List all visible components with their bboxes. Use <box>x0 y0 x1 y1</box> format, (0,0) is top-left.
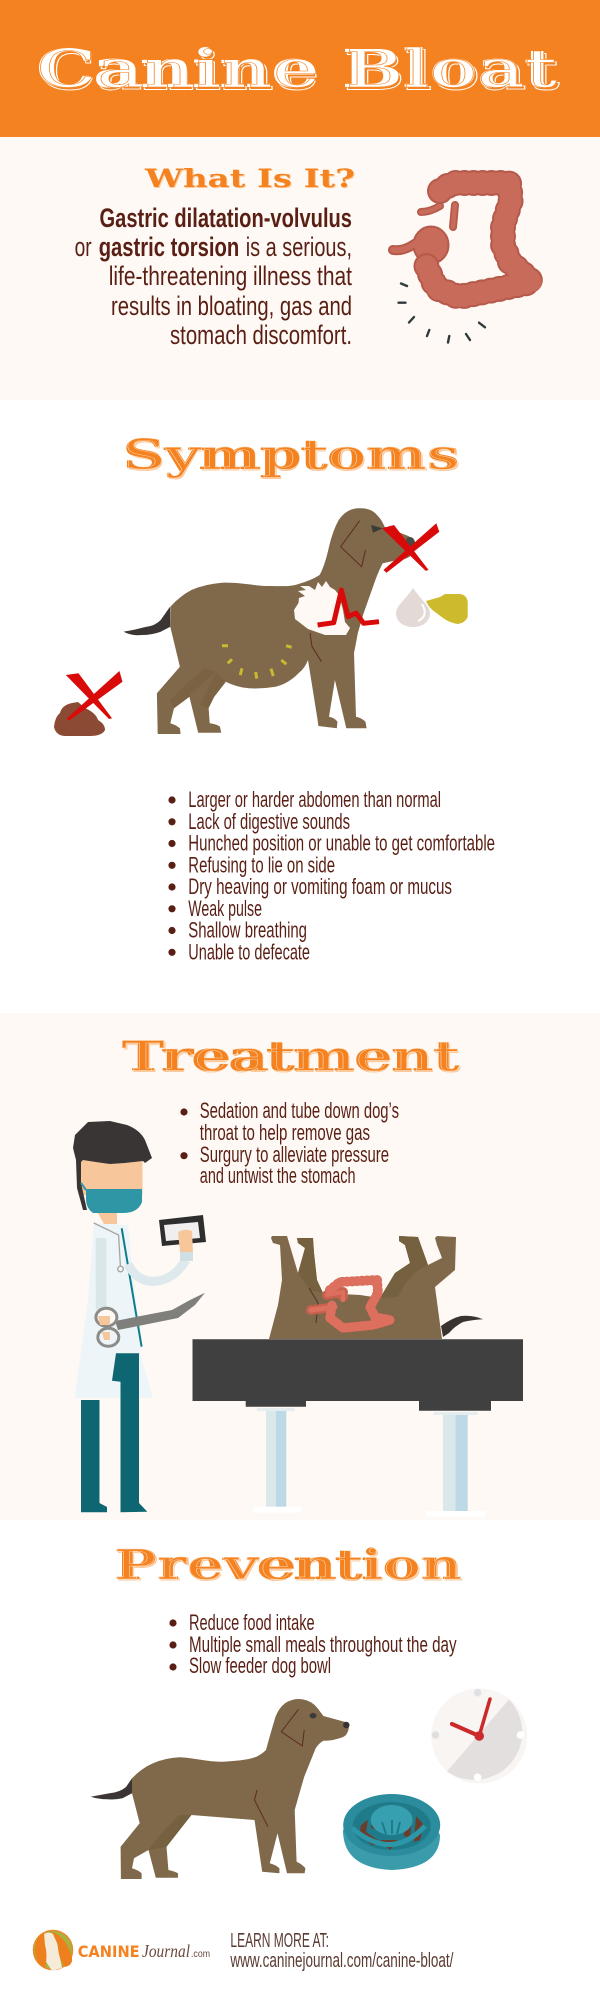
heading: what is it: What Is It? <box>144 164 355 193</box>
dog ear <box>341 521 366 567</box>
title: Canine Bloat <box>38 42 560 102</box>
symptoms bullet list: Lack of digestive sounds <box>188 809 350 834</box>
logo: canine journal <box>34 1930 210 1971</box>
tablet <box>159 1215 206 1246</box>
clock centre <box>474 1731 484 1741</box>
table top <box>192 1339 523 1411</box>
prevention bullet list: Multiple small meals throughout the day <box>189 1632 457 1657</box>
heading: symptoms <box>122 431 461 480</box>
logo circle <box>34 1930 72 1970</box>
heading: prevention: Prevention <box>114 1541 462 1589</box>
vet pants right <box>112 1353 147 1512</box>
logo left ear <box>35 1933 46 1968</box>
treatment bullet list: and untwist the stomach <box>200 1163 356 1188</box>
heading: what is it: What Is It? <box>145 165 356 194</box>
symptoms bullet list: Larger or harder abdomen than normal <box>188 787 441 812</box>
pulse line <box>318 590 379 625</box>
right table leg <box>426 1412 485 1517</box>
text block: definition: stomach discomfort. <box>170 320 352 350</box>
coat teal seam <box>122 1228 142 1347</box>
vet arm <box>128 1260 186 1281</box>
symptoms bullet list: Unable to defecate <box>188 939 310 964</box>
icon: slow feeder bowl <box>343 1794 440 1870</box>
prevention bullet list <box>169 1610 457 1678</box>
patient tail <box>441 1316 483 1337</box>
clock face <box>431 1688 527 1784</box>
treatment bullet list: throat to help remove gas <box>200 1120 370 1145</box>
healthy dog chest line <box>254 1790 268 1827</box>
dog eye <box>371 525 383 533</box>
logo script: Journal <box>142 1941 190 1961</box>
heading: symptoms: Symptoms <box>122 431 460 479</box>
vet neck <box>95 1208 117 1224</box>
patient intestines <box>311 1280 390 1328</box>
vet face <box>81 1155 142 1195</box>
icon: intestines <box>393 183 532 297</box>
bowl ridge arc <box>352 1826 425 1845</box>
text block: definition <box>75 203 352 350</box>
heading: prevention: Prevention <box>114 1541 462 1589</box>
prevention bullet list: Reduce food intake <box>189 1610 315 1635</box>
heading: symptoms: Symptoms <box>122 431 460 479</box>
vet mask strap <box>81 1183 86 1190</box>
bowl centre spokes <box>382 1820 400 1834</box>
patient leg shades <box>297 1236 428 1298</box>
logo right ear <box>52 1932 72 1967</box>
text block: definition: Gastric dilatation-volvulus <box>100 203 352 233</box>
healthy dog body <box>121 1699 349 1879</box>
belly ticks <box>222 646 292 679</box>
coat shade <box>96 1238 106 1310</box>
scissors <box>96 1293 205 1346</box>
heading: treatment <box>122 1033 461 1082</box>
illustration: dog on table <box>269 1236 483 1339</box>
scissor ring top <box>96 1308 117 1326</box>
vet hand <box>178 1230 193 1252</box>
footer call to action <box>230 1930 454 1972</box>
prevention bullet list: Slow feeder dog bowl <box>189 1653 331 1678</box>
scissor blades <box>115 1293 205 1330</box>
icon: poop <box>54 702 105 736</box>
panel: what is it background <box>0 137 600 400</box>
heading: treatment: Treatment <box>123 1034 461 1082</box>
icon: foam drop <box>396 588 430 627</box>
left table leg <box>253 1408 301 1513</box>
text block: definition: gastric torsion <box>99 232 239 262</box>
symptoms bullet list <box>168 787 495 964</box>
patient body <box>269 1236 456 1339</box>
bowl food <box>359 1816 424 1850</box>
text block: definition: or <box>75 232 92 262</box>
panel: prevention background <box>0 1520 600 1995</box>
heading: treatment: Treatment <box>122 1033 461 1081</box>
treatment bullet list: Sedation and tube down dog’s <box>200 1098 399 1123</box>
vet pants left <box>81 1400 107 1512</box>
vet coat <box>75 1223 153 1398</box>
healthy dog ear <box>281 1709 304 1746</box>
text block: definition: life-threatening illness that <box>109 261 352 291</box>
vet mask <box>86 1189 142 1213</box>
title: Canine Bloat <box>36 39 557 100</box>
illustration: operating table <box>192 1339 523 1517</box>
heading: symptoms: Symptoms <box>124 432 461 480</box>
heading: prevention: Prevention <box>116 1542 464 1590</box>
panel: symptoms background <box>0 400 600 1013</box>
healthy dog eye <box>310 1713 316 1718</box>
illustration: bloated dog <box>124 508 415 734</box>
icon: vomit <box>426 594 468 624</box>
vet hair <box>73 1121 152 1210</box>
illustration: veterinarian <box>73 1121 206 1512</box>
icon: red x over poop <box>66 671 122 721</box>
dog chest line <box>310 633 322 662</box>
clock markers <box>432 1689 524 1781</box>
bowl inner ring <box>353 1802 431 1850</box>
clock hands <box>452 1699 490 1736</box>
vet fingers <box>98 1316 110 1340</box>
symptoms bullet list: Weak pulse <box>188 896 262 921</box>
symptoms bullet list: Shallow breathing <box>188 918 307 942</box>
stethoscope bell <box>118 1266 123 1272</box>
healthy dog nose <box>343 1722 349 1728</box>
icon: pain ticks <box>398 284 485 342</box>
patient chest line <box>309 1288 318 1323</box>
bowl rim <box>343 1794 440 1856</box>
stethoscope <box>94 1223 120 1268</box>
dog hind leg shade <box>170 668 226 708</box>
icon: clock <box>431 1688 527 1784</box>
text block: definition: results in bloating, gas and <box>111 291 352 321</box>
panel: treatment background <box>0 1013 600 1520</box>
title: Canine Bloat <box>36 40 557 100</box>
icon: red x over mouth <box>382 523 439 573</box>
logo domain: .com <box>191 1949 210 1960</box>
logo dog face <box>42 1933 62 1971</box>
scissor ring bottom <box>98 1328 119 1346</box>
footer call to action: www.caninejournal.com/canine-bloat/ <box>230 1950 454 1972</box>
symptoms bullet list: Dry heaving or vomiting foam or mucus <box>188 874 452 899</box>
bowl base <box>343 1825 440 1870</box>
clock shadow wedge <box>447 1700 522 1780</box>
dog muzzle dark <box>405 537 415 549</box>
healthy dog thigh shade <box>148 1815 191 1850</box>
header band <box>0 0 600 137</box>
symptoms bullet list: Refusing to lie on side <box>188 852 335 877</box>
footer call to action: LEARN MORE AT: <box>230 1930 329 1952</box>
bowl centre <box>371 1805 413 1835</box>
text block: definition: is a serious, <box>246 232 352 262</box>
heading: prevention <box>114 1541 464 1590</box>
cuff <box>180 1252 193 1261</box>
treatment bullet list: Surgury to alleviate pressure <box>200 1142 389 1167</box>
heart <box>294 581 350 635</box>
illustration: healthy dog <box>91 1699 349 1879</box>
dog tail <box>124 607 170 635</box>
healthy dog tail <box>91 1778 132 1800</box>
treatment bullet list <box>180 1098 399 1188</box>
heading: treatment: Treatment <box>122 1033 460 1081</box>
title <box>36 39 560 102</box>
dog body <box>157 508 415 734</box>
logo wordmark: CANINE <box>78 1942 140 1961</box>
tablet screen <box>164 1222 200 1241</box>
